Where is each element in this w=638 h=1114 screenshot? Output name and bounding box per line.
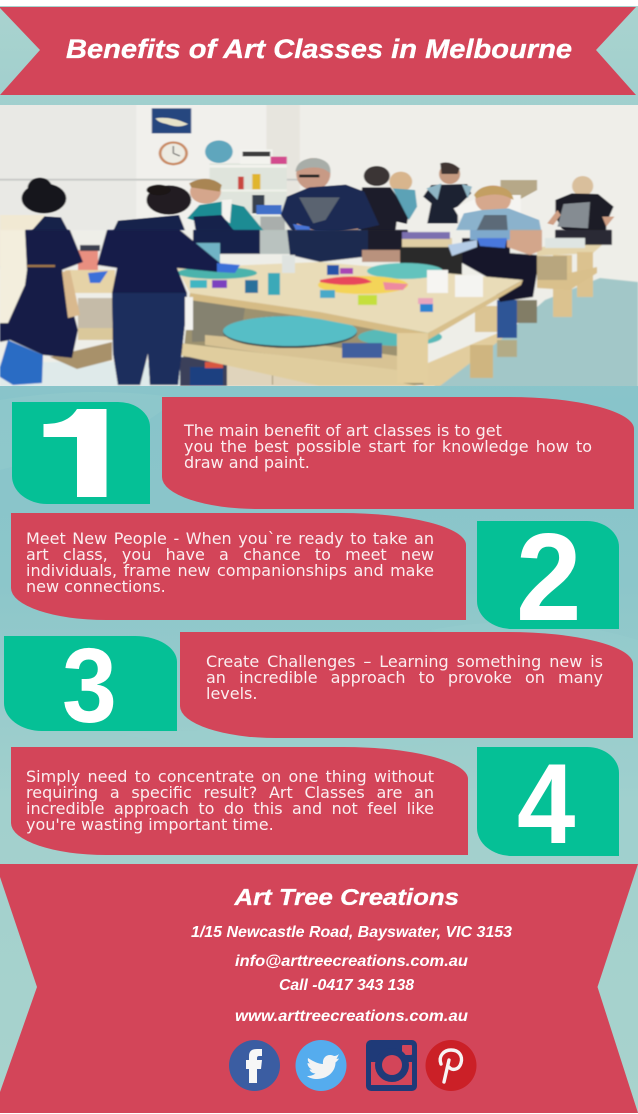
seated woman in cream apron lower body xyxy=(0,230,83,358)
table items xyxy=(367,263,443,279)
step 1 text: The main benefit of art classes is to get xyxy=(184,420,502,440)
floor clutter and boxes xyxy=(180,357,227,386)
phone: Call -0417 343 138 xyxy=(279,977,414,994)
left boxes and shelf xyxy=(78,250,98,270)
shelf unit and people behind the table xyxy=(193,230,261,254)
step 2 text xyxy=(26,528,434,596)
website: www.arttreecreations.com.au xyxy=(235,1008,469,1025)
lower table beams and legs xyxy=(180,343,420,386)
step 4 text: you're wasting important time. xyxy=(26,814,274,834)
email: info@arttreecreations.com.au xyxy=(235,953,469,970)
address: 1/15 Newcastle Road, Bayswater, VIC 3153 xyxy=(191,924,512,941)
step 4 text: requiring a specific result? Art Classes are an xyxy=(26,782,434,802)
company name: Art Tree Creations xyxy=(233,884,459,910)
main table top xyxy=(177,262,523,333)
icon: twitter xyxy=(296,1040,346,1091)
step 2 number tile xyxy=(477,508,619,647)
step 3 number tile xyxy=(4,626,177,745)
step 3 text: Create Challenges – Learning something new is xyxy=(206,652,603,670)
step 1 text: you the best possible start for knowledge how to xyxy=(184,436,592,456)
step 4 text: incredible approach to do this and not feel like xyxy=(26,798,434,818)
icon: pinterest xyxy=(426,1040,476,1091)
step 1 number tile xyxy=(12,402,150,504)
back table xyxy=(536,244,602,257)
step 4 text: Simply need to concentrate on one thing without xyxy=(26,766,434,786)
step 1 text xyxy=(184,420,592,472)
step 2 text: art class, you have a chance to meet new xyxy=(26,544,434,564)
step 2 text: Meet New People - When you`re ready to take an xyxy=(26,528,434,548)
numeral 4: 4 xyxy=(517,741,575,868)
step 4 text xyxy=(26,766,434,834)
lower wall and floor xyxy=(0,230,638,390)
numeral 1: 1 xyxy=(34,385,150,524)
step 4 number tile xyxy=(477,741,619,868)
step 1 card xyxy=(162,397,634,509)
icon: instagram xyxy=(366,1040,417,1091)
main table under-area xyxy=(180,293,428,385)
numeral 2: 2 xyxy=(516,508,582,647)
step 3 text: an incredible approach to provoke on many xyxy=(206,668,603,686)
step 3 text xyxy=(206,652,603,702)
gloves xyxy=(448,240,477,256)
step 2 card xyxy=(11,513,466,620)
step 1 text: draw and paint. xyxy=(184,452,310,472)
standing woman legs and apron xyxy=(497,300,517,338)
step 4 card xyxy=(11,747,468,855)
icon: facebook xyxy=(229,1040,280,1091)
footer ribbon xyxy=(0,864,638,1113)
step 3 card xyxy=(180,632,633,738)
step 2 text: new connections. xyxy=(26,576,166,596)
step 3 text: levels. xyxy=(206,684,257,702)
photo: art class around wooden tables xyxy=(0,103,638,390)
woman in navy lower body xyxy=(97,230,220,385)
step 2 text: individuals, frame new companionships and make xyxy=(26,560,434,580)
numeral 3: 3 xyxy=(62,626,117,745)
title: Benefits of Art Classes in Melbourne xyxy=(66,34,572,64)
title banner xyxy=(0,7,636,95)
